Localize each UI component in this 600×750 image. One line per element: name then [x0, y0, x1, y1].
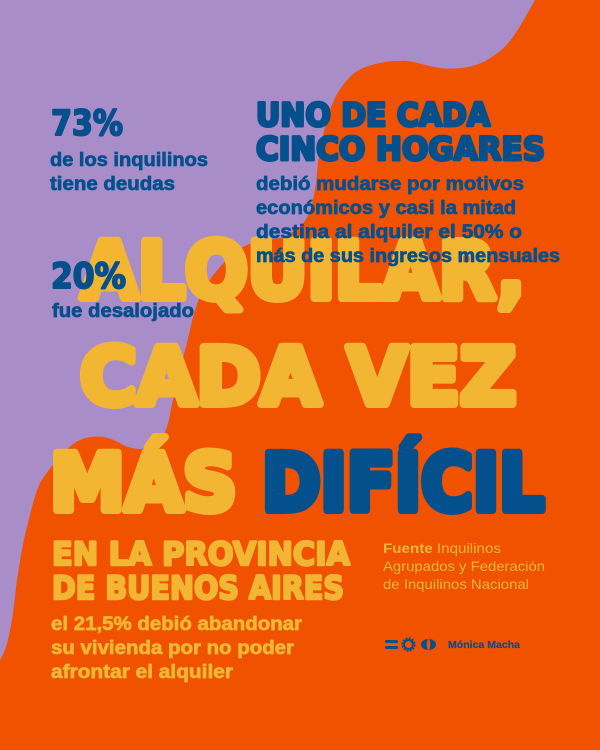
source note: Agrupados y Federación	[383, 558, 545, 574]
text: 21,5% abandonó su vivienda	[51, 614, 303, 683]
text: 21,5% abandonó su vivienda: afrontar el alquiler	[51, 662, 234, 683]
heading: uno de cada cinco hogares: CINCO HOGARES	[256, 130, 545, 168]
source note: Fuente Inquilinos	[383, 540, 501, 556]
text: de los inquilinos tiene deudas	[50, 150, 208, 195]
source note	[383, 540, 545, 592]
heading: en la provincia de Buenos Aires	[52, 535, 350, 607]
title line: CADA VEZ: CADA VEZ	[80, 333, 516, 423]
icon: flag lines	[385, 640, 398, 649]
heading: uno de cada cinco hogares: UNO DE CADA	[256, 96, 490, 134]
text: fue desalojado: fue desalojado	[52, 301, 194, 322]
number: 20%: 20%	[51, 257, 126, 297]
text: mudanza y alquiler: más de sus ingresos mensuales	[256, 246, 560, 267]
source note: de Inquilinos Nacional	[383, 576, 529, 592]
icon: oval	[421, 639, 436, 650]
text: mudanza y alquiler: económicos y casi la mitad	[256, 198, 516, 219]
text: de los inquilinos tiene deudas: tiene deudas	[50, 174, 175, 195]
text: mudanza y alquiler	[256, 174, 560, 267]
text: 21,5% abandonó su vivienda: su vivienda por no poder	[51, 638, 295, 659]
text: de los inquilinos tiene deudas: de los inquilinos	[50, 150, 208, 171]
stat: 20%	[51, 257, 194, 322]
title line: DIFÍCIL: DIFÍCIL	[262, 437, 544, 529]
icon: gear	[402, 638, 415, 651]
logos	[385, 638, 520, 651]
heading: uno de cada cinco hogares	[256, 96, 545, 168]
title: Alquilar, cada vez más difícil	[50, 227, 544, 529]
title line: ALQUILAR,: ALQUILAR,	[81, 227, 525, 317]
signature: Mónica Macha: Mónica Macha	[448, 639, 520, 651]
heading: en la provincia de Buenos Aires: EN LA PROVINCIA	[52, 535, 350, 573]
background: purple wave	[0, 0, 535, 660]
stat: uno de cada cinco hogares	[256, 96, 560, 267]
heading: en la provincia de Buenos Aires: DE BUENOS AIRES	[52, 569, 344, 607]
text: mudanza y alquiler: debió mudarse por motivos	[256, 174, 524, 195]
text: 21,5% abandonó su vivienda: el 21,5% debió abandonar	[51, 614, 303, 635]
number: 73%: 73%	[51, 104, 123, 144]
title line: MÁS: MÁS	[50, 437, 237, 529]
stat: provincia de Buenos Aires	[51, 535, 350, 683]
stat: 73%	[50, 104, 208, 195]
text: mudanza y alquiler: destina al alquiler el 50% o	[256, 222, 522, 243]
